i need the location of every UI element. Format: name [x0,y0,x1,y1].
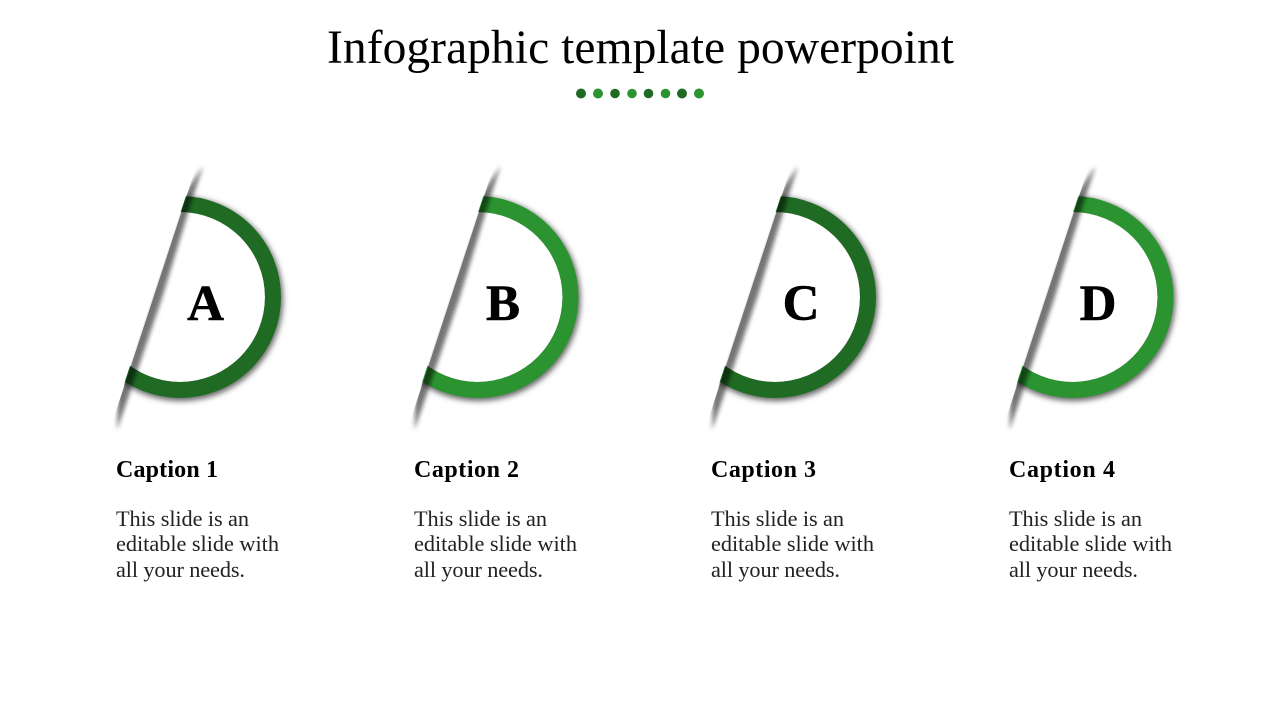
panel A [114,166,288,582]
caption 1 body: all your needs. [116,557,245,582]
caption 2 body: This slide is an [414,506,547,531]
panel C [709,166,882,582]
panel B [412,166,585,582]
icon: half ring C [709,166,882,430]
title: Infographic template powerpoint [327,22,954,74]
icon: half ring B [412,166,585,430]
caption 2 heading: Caption 2 [414,457,519,483]
letter B: B [486,276,520,332]
caption 1 body: This slide is an [116,506,249,531]
caption 1 heading: Caption 1 [116,457,218,483]
caption 3 heading: Caption 3 [711,457,816,483]
caption 4 body: all your needs. [1009,557,1138,582]
letter C: C [783,276,819,332]
icon: half ring D [1006,166,1180,430]
caption 4 body: editable slide with [1009,531,1172,556]
caption 2 body: editable slide with [414,531,577,556]
caption 1 body: editable slide with [116,531,279,556]
caption 4 heading: Caption 4 [1009,457,1115,483]
dotted divider [576,88,704,98]
letter A: A [187,276,224,332]
caption 4 body: This slide is an [1009,506,1142,531]
caption 3 body: editable slide with [711,531,874,556]
caption 3 body: This slide is an [711,506,844,531]
letter D: D [1080,276,1116,332]
panel D [1006,166,1180,582]
icon: half ring A [114,166,288,430]
caption 2 body: all your needs. [414,557,543,582]
caption 3 body: all your needs. [711,557,840,582]
